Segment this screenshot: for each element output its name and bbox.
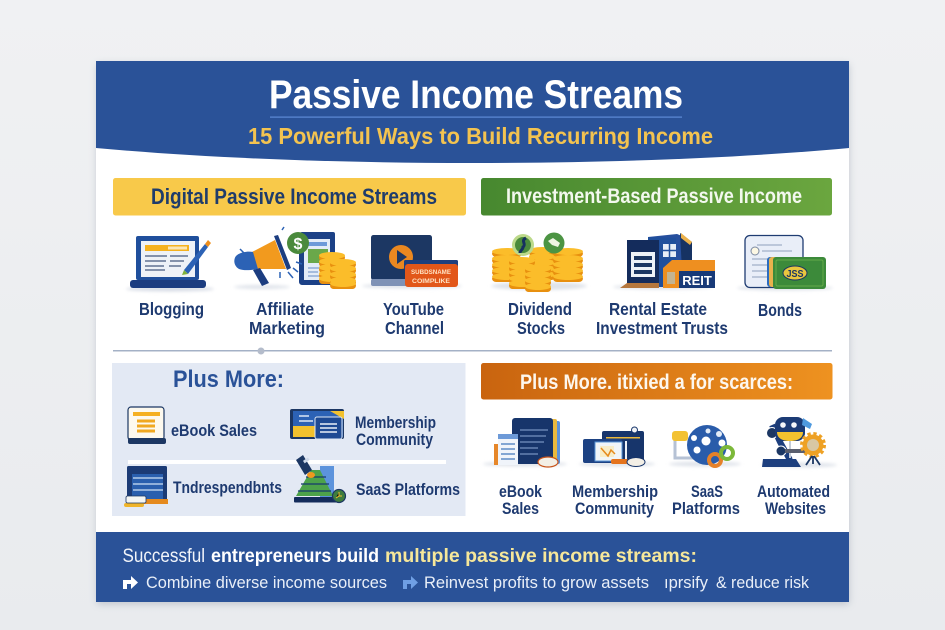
label: eBook sales: Sales (502, 499, 539, 518)
label: eBook sales (499, 482, 542, 518)
icon: affiliate marketing megaphone (234, 227, 356, 289)
label: YouTube channel (383, 299, 444, 338)
footer headline (122, 546, 697, 567)
item: independents: Tndrespendbnts (173, 478, 282, 497)
subtitle: 15 Powerful Ways to Build Recurring Income (248, 123, 713, 149)
label: eBook sales: eBook (499, 482, 542, 501)
item: membership community: Community (356, 430, 433, 449)
label: dividend stocks: Dividend (508, 299, 572, 319)
label: SaaS platforms: SaaS (691, 482, 723, 501)
label: YouTube channel: YouTube (383, 299, 444, 319)
footer tip: reduce risk (664, 573, 809, 592)
footer headline: multiple passive income streams: (385, 546, 697, 567)
label: SaaS platforms (672, 482, 740, 518)
icon: affiliate marketing megaphone: $ (294, 236, 303, 253)
label: membership community: Membership (572, 482, 658, 501)
footer headline: entrepreneurs build (211, 546, 379, 567)
label: affiliate marketing (249, 299, 325, 338)
footer headline: Successful (122, 546, 205, 567)
label: bonds: Bonds (758, 300, 802, 320)
icon: membership (290, 409, 344, 439)
label: automated websites: Automated (757, 482, 830, 501)
item: membership community: Membership (355, 413, 436, 432)
footer tip: combine: Combine diverse income sources (146, 573, 387, 592)
label: rental estate investment trusts: Rental Estate (609, 299, 707, 319)
icon: SaaS pyramid (294, 455, 346, 502)
icon: membership screens (579, 427, 655, 466)
icon: automated robot (761, 417, 837, 468)
footer tip: reduce risk: & reduce risk (716, 573, 809, 592)
infographic card (96, 61, 849, 602)
section banner: investment (481, 178, 832, 216)
label: membership community: Community (575, 499, 654, 518)
label: rental estate investment trusts (596, 299, 728, 338)
section banner: plus more orange: Plus More. itixied a for scarces: (520, 371, 793, 394)
icon: bonds (737, 236, 833, 290)
footer tip: reduce risk: ıprsify (664, 573, 708, 592)
icon: bonds: JSS (786, 269, 804, 280)
item: ebook sales: eBook Sales (171, 421, 257, 440)
label: automated websites: Websites (765, 499, 826, 518)
label: rental estate investment trusts: Investment Trusts (596, 318, 728, 338)
item: SaaS platforms: SaaS Platforms (356, 480, 460, 499)
section banner: digital (113, 178, 466, 216)
label: dividend stocks (508, 299, 572, 338)
label: automated websites (757, 482, 830, 518)
item: membership community (355, 413, 436, 449)
section banner: digital: Digital Passive Income Streams (151, 184, 437, 209)
label: blogging: Blogging (139, 299, 204, 319)
footer tip: reinvest: Reinvest profits to grow assets (424, 573, 649, 592)
footer band (96, 532, 849, 602)
icon: blogging laptop (126, 236, 214, 292)
panel: plus more list (112, 363, 466, 516)
label: affiliate marketing: Marketing (249, 318, 325, 338)
label: SaaS platforms: Platforms (672, 499, 740, 518)
label: membership community (572, 482, 658, 518)
icon: independents (124, 466, 168, 507)
label: dividend stocks: Stocks (517, 318, 565, 338)
icon: YouTube channel: COIMPLIKE (412, 278, 451, 285)
title: Passive Income Streams (269, 73, 683, 117)
label: affiliate marketing: Affiliate (256, 299, 314, 319)
section banner: investment: Investment-Based Passive Income (506, 185, 802, 208)
icon: YouTube channel (362, 235, 462, 288)
icon: YouTube channel: SUBDSNAME (411, 269, 452, 276)
icon: dividend coins (491, 232, 587, 292)
icon: SaaS globe (669, 425, 741, 466)
panel heading: Plus More: (173, 366, 284, 393)
label: YouTube channel: Channel (385, 318, 444, 338)
icon: REIT buildings: REIT (682, 273, 712, 288)
section banner: plus more orange (481, 363, 832, 400)
icon: eBook stack (483, 418, 567, 467)
header band (96, 61, 849, 163)
icon: REIT buildings (613, 233, 715, 290)
icon: ebook (128, 407, 166, 444)
